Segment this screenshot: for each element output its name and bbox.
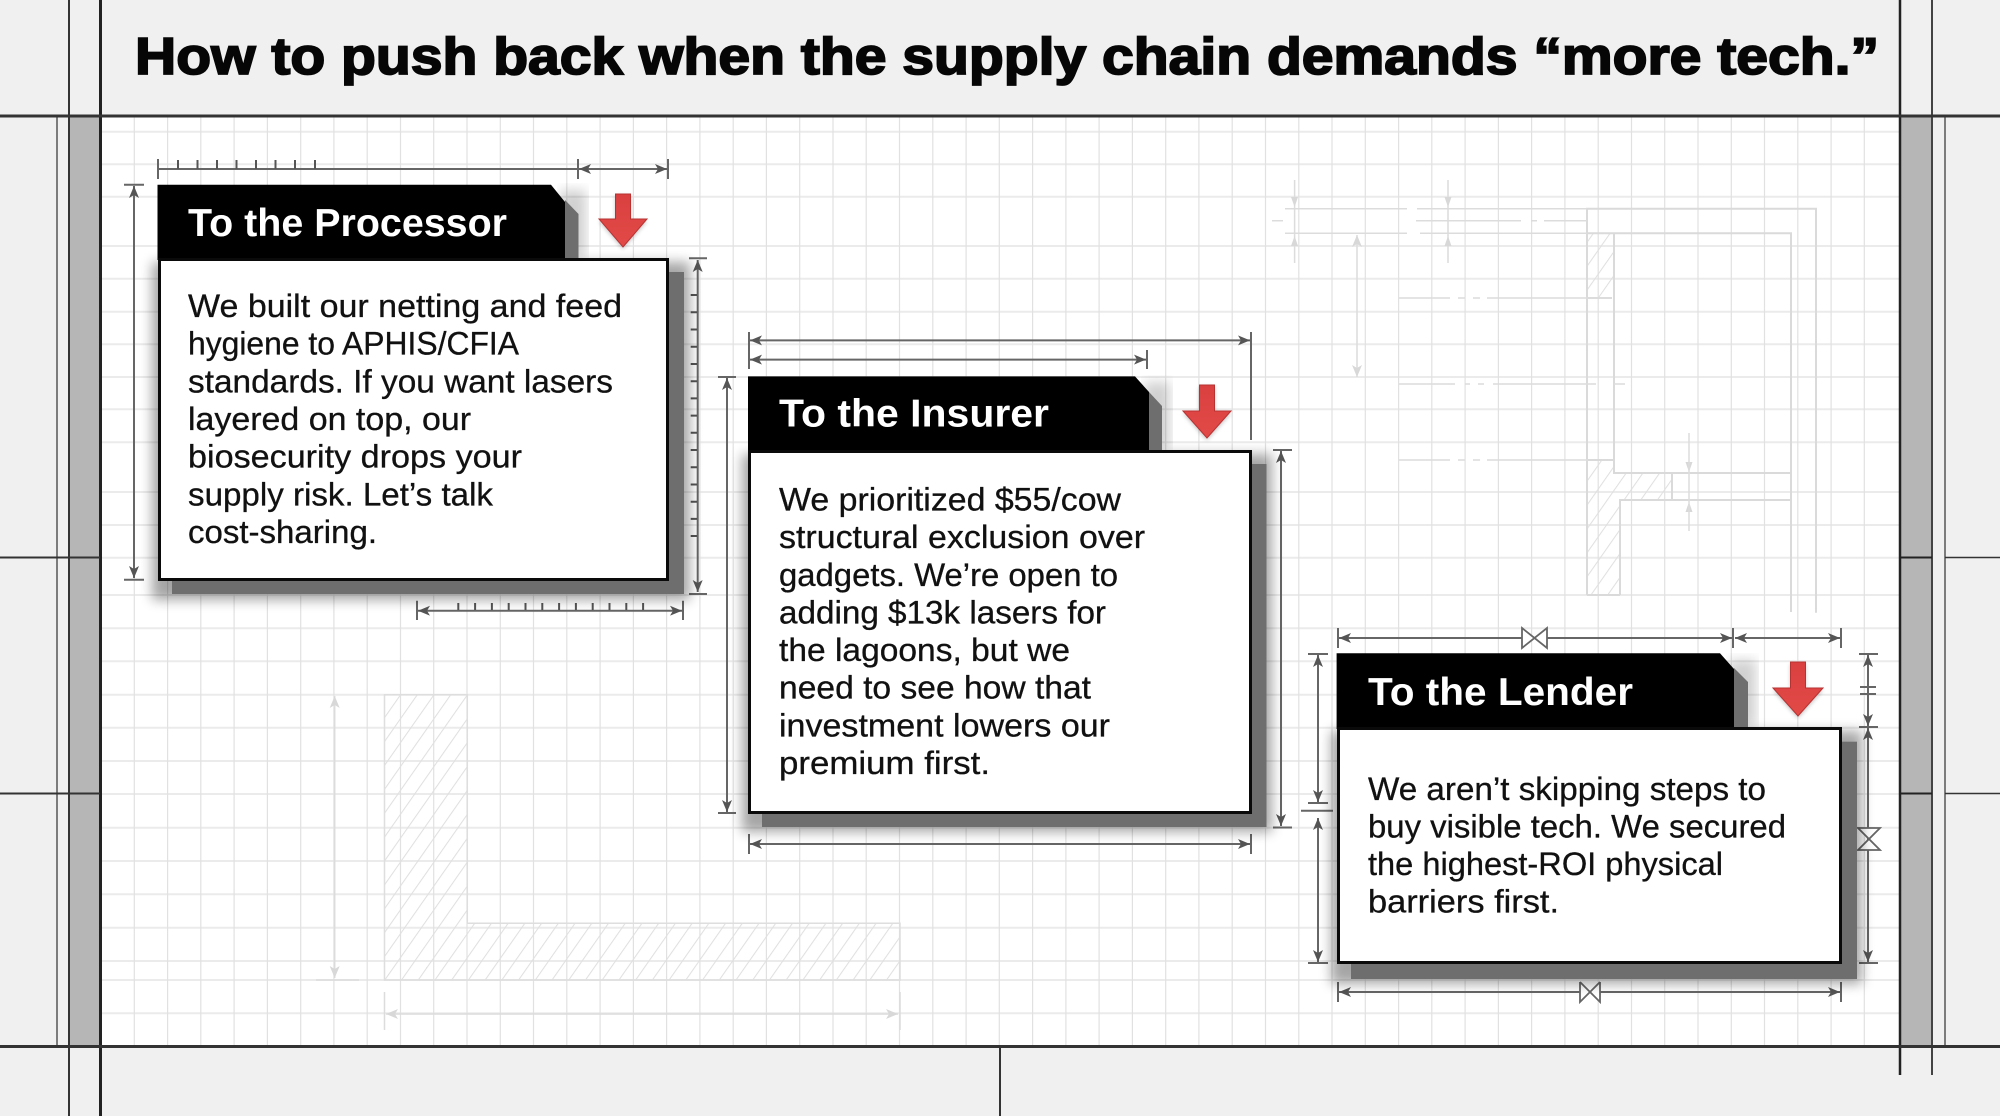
icon: red down arrow, lender [1773,662,1823,718]
card body: lender: We aren’t skipping steps to [1368,771,1766,807]
card body: lender: the highest-ROI physical [1368,846,1723,882]
icon: red down arrow, processor [599,194,647,249]
card body: insurer: the lagoons, but we [779,632,1070,668]
icon: red down arrow, insurer [1183,385,1231,440]
panel: to the insurer [718,332,1292,854]
card shadow [742,382,1272,832]
dimension lines around insurer card [718,332,1292,854]
card body: insurer: structural exclusion over [779,519,1145,555]
card shadow [152,190,690,600]
card body: processor [160,260,668,580]
card body: processor: layered on top, our [188,401,471,437]
faint blueprint: L-shaped section, lower left [316,695,900,1030]
card body: processor: biosecurity drops your [188,439,522,475]
card body: lender [1338,728,1840,962]
card body: processor: cost-sharing. [188,514,377,550]
title: How to push back when the supply chain demands “more tech.” [135,28,1879,86]
card shadow [1331,660,1862,984]
card body: processor: hygiene to APHIS/CFIA [188,326,520,362]
card body: processor: We built our netting and feed [188,288,622,324]
tab: processor heading: To the Processor [188,202,507,245]
tab: lender heading [1337,653,1734,729]
panel: to the lender [1301,628,1880,1002]
tab: insurer heading: To the Insurer [779,392,1049,435]
card body: processor: standards. If you want lasers [188,363,613,399]
card body: insurer: adding $13k lasers for [779,594,1106,630]
card body: insurer: premium first. [779,745,990,781]
card body: insurer: investment lowers our [779,707,1110,743]
card body: insurer: need to see how that [779,670,1091,706]
card body: insurer: We prioritized $55/cow [779,482,1122,518]
drawing sheet [100,116,1900,1047]
panel: to the processor [124,159,707,620]
left frame band [0,0,100,1116]
right frame band [1900,0,2000,1075]
card body: processor: supply risk. Let’s talk [188,476,494,512]
tab: processor heading [158,185,565,260]
card body: lender: buy visible tech. We secured [1368,808,1786,844]
dimension lines around processor card [124,159,707,620]
faint blueprint: wall section, upper right [1272,180,1816,613]
card body: insurer: gadgets. We’re open to [779,557,1118,593]
dimension lines around lender card [1301,628,1880,1002]
tab: lender heading: To the Lender [1368,671,1633,714]
card body: lender: barriers first. [1368,884,1559,920]
tab: insurer heading [748,376,1149,452]
card body: insurer [750,452,1250,812]
